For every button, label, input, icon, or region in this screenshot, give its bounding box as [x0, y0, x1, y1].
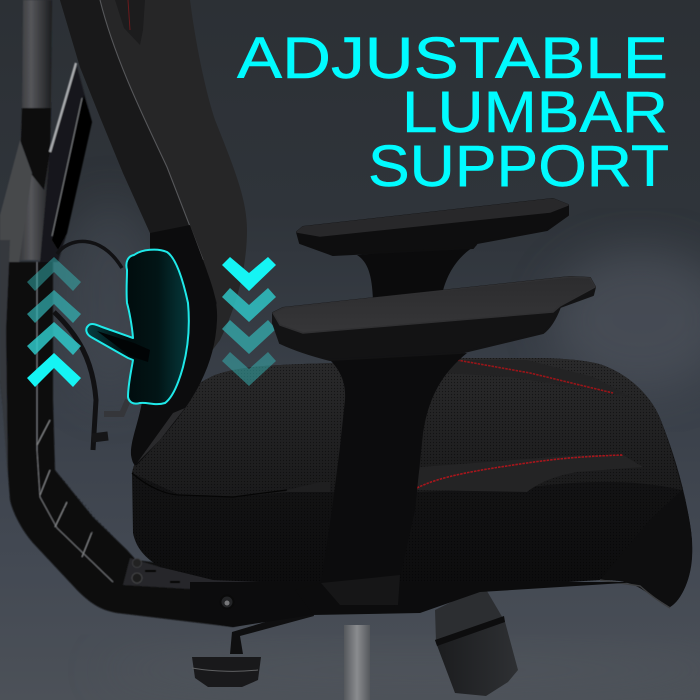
chevron up 3 [27, 322, 81, 355]
title line 3: SUPPORT [368, 134, 669, 199]
caster wheel [435, 586, 518, 696]
chevrons moving up [27, 257, 81, 387]
seat top panel [445, 360, 633, 398]
seat plate [123, 558, 310, 590]
seat mechanism [190, 582, 640, 627]
lumbar support highlighted [86, 250, 189, 404]
title line 1: ADJUSTABLE [237, 26, 668, 91]
chair back inner pad [131, 225, 217, 465]
chevron up 2 [27, 290, 81, 323]
seat cushion [132, 358, 692, 608]
chair frame [0, 0, 312, 627]
red seam at top [115, 0, 145, 45]
tilt knob [192, 608, 314, 687]
lower frame [0, 262, 312, 627]
right bolster shading [600, 490, 692, 607]
chevron down 4 [222, 352, 276, 386]
rear armrest [297, 199, 568, 300]
title [237, 26, 669, 199]
seat lower panel [415, 455, 643, 492]
chevron up 1 [27, 257, 81, 291]
title line 2: LUMBAR [402, 80, 668, 145]
chevron down 3 [222, 320, 276, 354]
gas cylinder [344, 625, 370, 700]
chair back outer pad [60, 0, 247, 380]
front armrest and post [273, 277, 595, 613]
chevron down 2 [222, 288, 276, 322]
red stitching [457, 360, 613, 393]
second strut [40, 63, 92, 262]
chevron down 1 [222, 257, 276, 291]
lumbar wire bracket [54, 241, 128, 450]
upper rail [14, 0, 52, 260]
chevron up 4 [27, 353, 81, 387]
chevrons moving down [222, 257, 276, 386]
